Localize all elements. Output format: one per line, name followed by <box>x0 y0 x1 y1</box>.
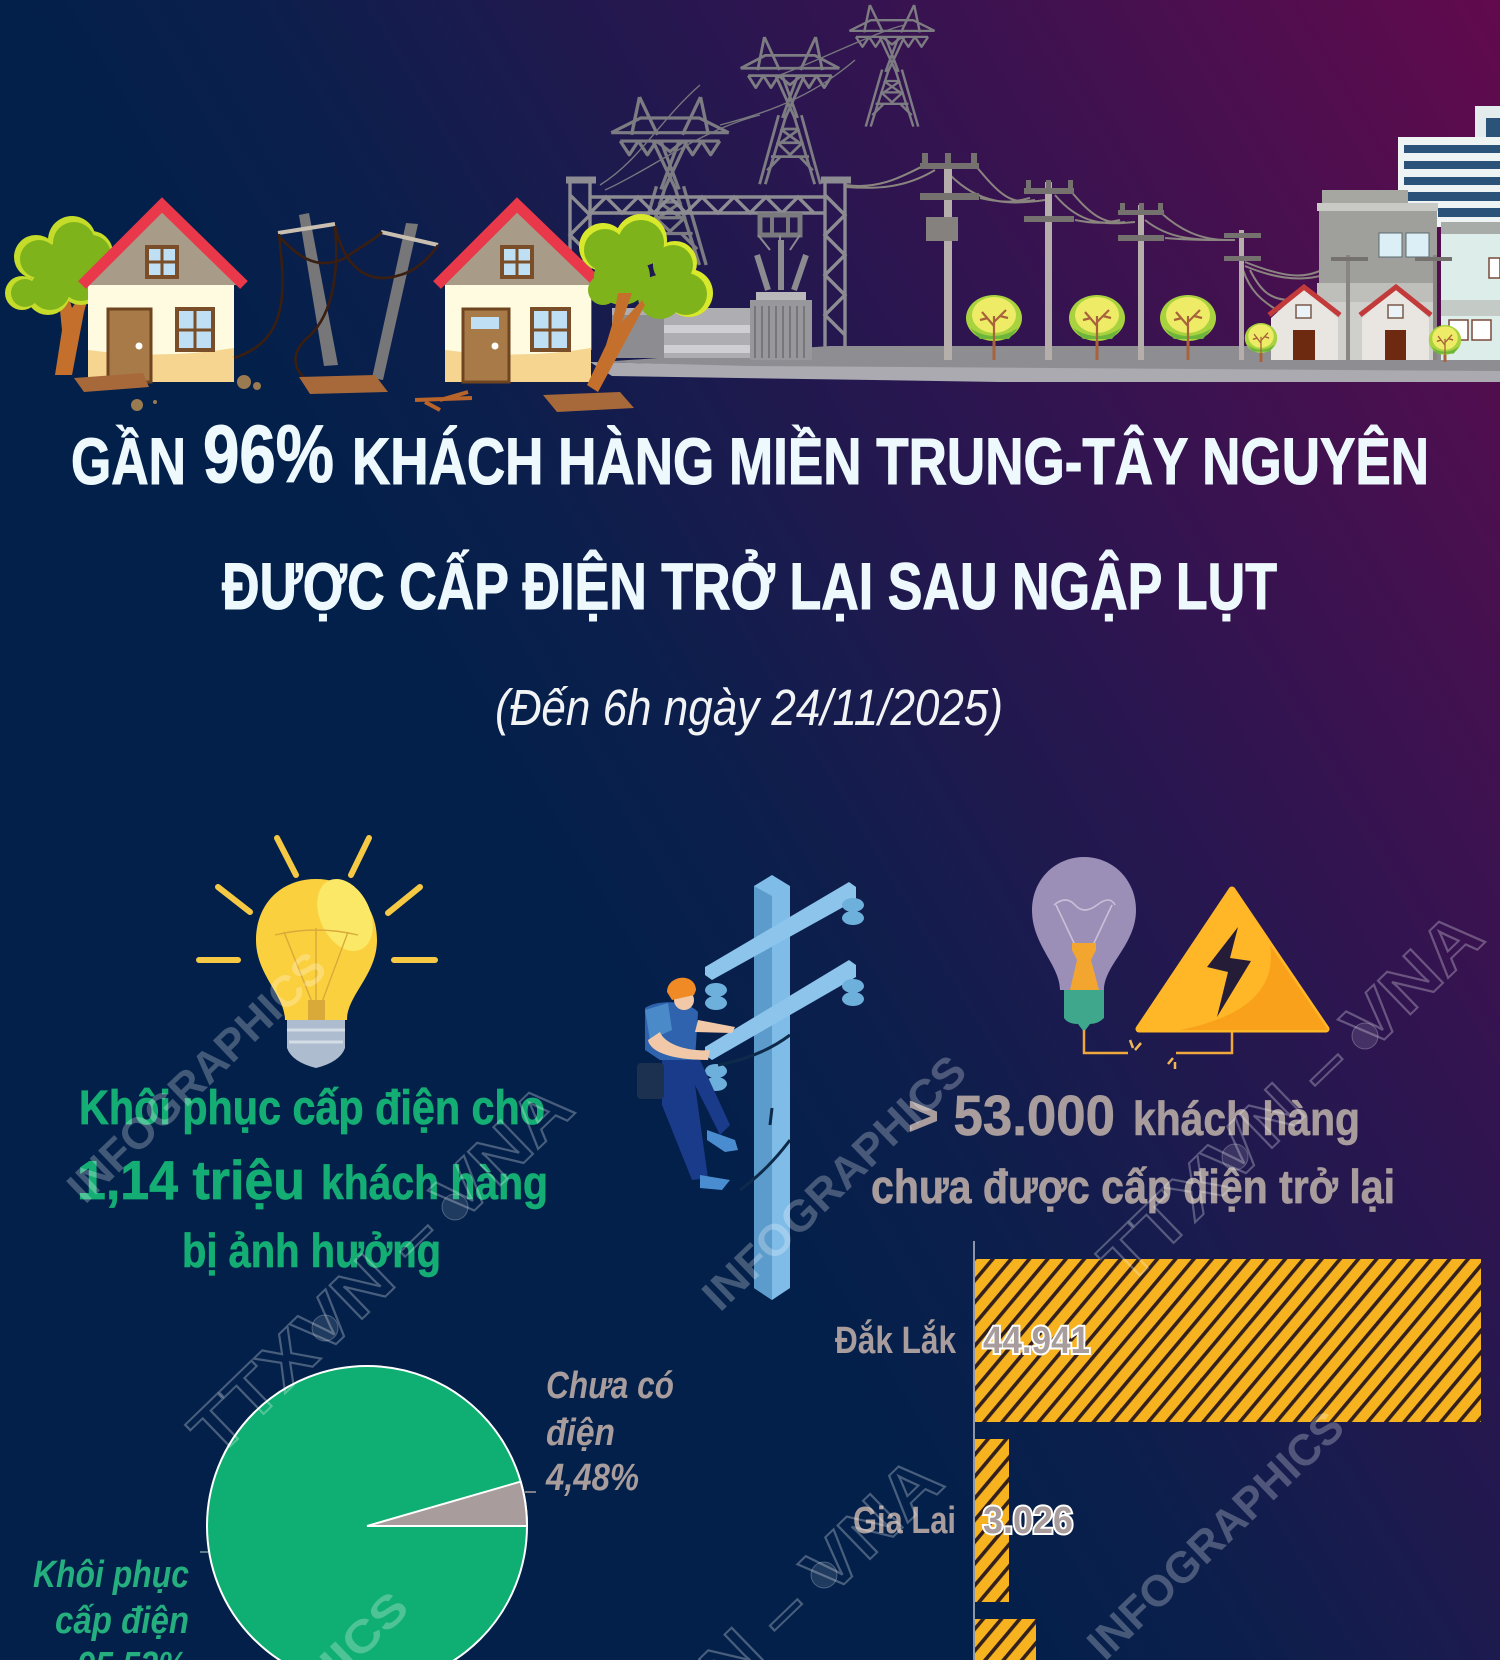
transmission towers <box>600 5 935 265</box>
distribution poles and wires <box>846 153 1430 360</box>
left house <box>82 205 244 382</box>
not restored customers text <box>871 1084 1395 1213</box>
small houses <box>1269 287 1431 360</box>
axis <box>973 1241 975 1660</box>
not restored customers text: khách hàng <box>1133 1092 1360 1145</box>
restored customers text: khách hàng <box>321 1156 548 1209</box>
watermarks: INFOGRAPHICS <box>58 943 336 1212</box>
wedge: not restored 4.48% <box>367 1482 527 1526</box>
substation gantry <box>566 180 851 353</box>
restored customers text: Khôi phục cấp điện cho <box>79 1082 545 1135</box>
subtitle date: (Đến 6h ngày 24/11/2025) <box>495 679 1003 736</box>
bar chart: customers without power by province <box>835 1241 1481 1660</box>
buildings <box>1317 106 1500 360</box>
title: GẦN <box>71 424 186 498</box>
restored customers text <box>77 1082 548 1277</box>
title: 96% <box>203 409 334 500</box>
pie chart: restoration share <box>207 1366 527 1660</box>
pie label: not restored <box>525 1365 674 1499</box>
pie label: not restored: 4,48% <box>545 1457 639 1499</box>
watermarks: TTXVN – VNA <box>175 1068 587 1470</box>
icon: dead bulb and high voltage warning <box>1032 857 1328 1069</box>
not restored customers text: > 53.000 <box>908 1084 1115 1148</box>
broken electric poles <box>234 213 438 394</box>
ground road <box>590 346 1500 382</box>
roadside trees <box>966 295 1461 362</box>
icon: glowing light bulb <box>199 838 435 1068</box>
bar: Đắk Lắk: 44.941 <box>983 1320 1090 1362</box>
illustration: damaged houses and poles <box>5 205 713 412</box>
transformer <box>612 215 812 360</box>
watermarks: TTXVN – VNA <box>1085 897 1497 1299</box>
restored customers text: bị ảnh hưởng <box>182 1224 441 1277</box>
left tree <box>5 216 113 375</box>
watermarks: INFOGRAPHICS <box>693 1046 976 1320</box>
pie label: not restored: điện <box>546 1412 615 1454</box>
illustration: power grid and city <box>566 5 1500 382</box>
title <box>71 409 1429 623</box>
right house <box>437 205 600 382</box>
pie label: restored <box>33 1552 208 1660</box>
bar: Đắk Lắk <box>835 1259 1481 1422</box>
pie label: not restored: Chưa có <box>546 1365 674 1407</box>
bar: third province <box>975 1619 1036 1660</box>
not restored customers text: chưa được cấp điện trở lại <box>871 1160 1395 1213</box>
bar: Gia Lai: 3.026 <box>983 1500 1073 1542</box>
right tree <box>579 214 713 392</box>
watermarks <box>58 897 1497 1660</box>
bar: Gia Lai: Gia Lai <box>853 1500 956 1542</box>
broken boards and debris <box>74 373 634 412</box>
pie label: restored: Khôi phục <box>33 1554 189 1596</box>
pie label: restored: cấp điện <box>55 1600 189 1642</box>
restored customers text: 1,14 triệu <box>77 1149 305 1211</box>
bar: Gia Lai <box>853 1439 1073 1602</box>
bar: Đắk Lắk: Đắk Lắk <box>835 1318 957 1362</box>
icon: worker repairing pole <box>637 875 864 1300</box>
